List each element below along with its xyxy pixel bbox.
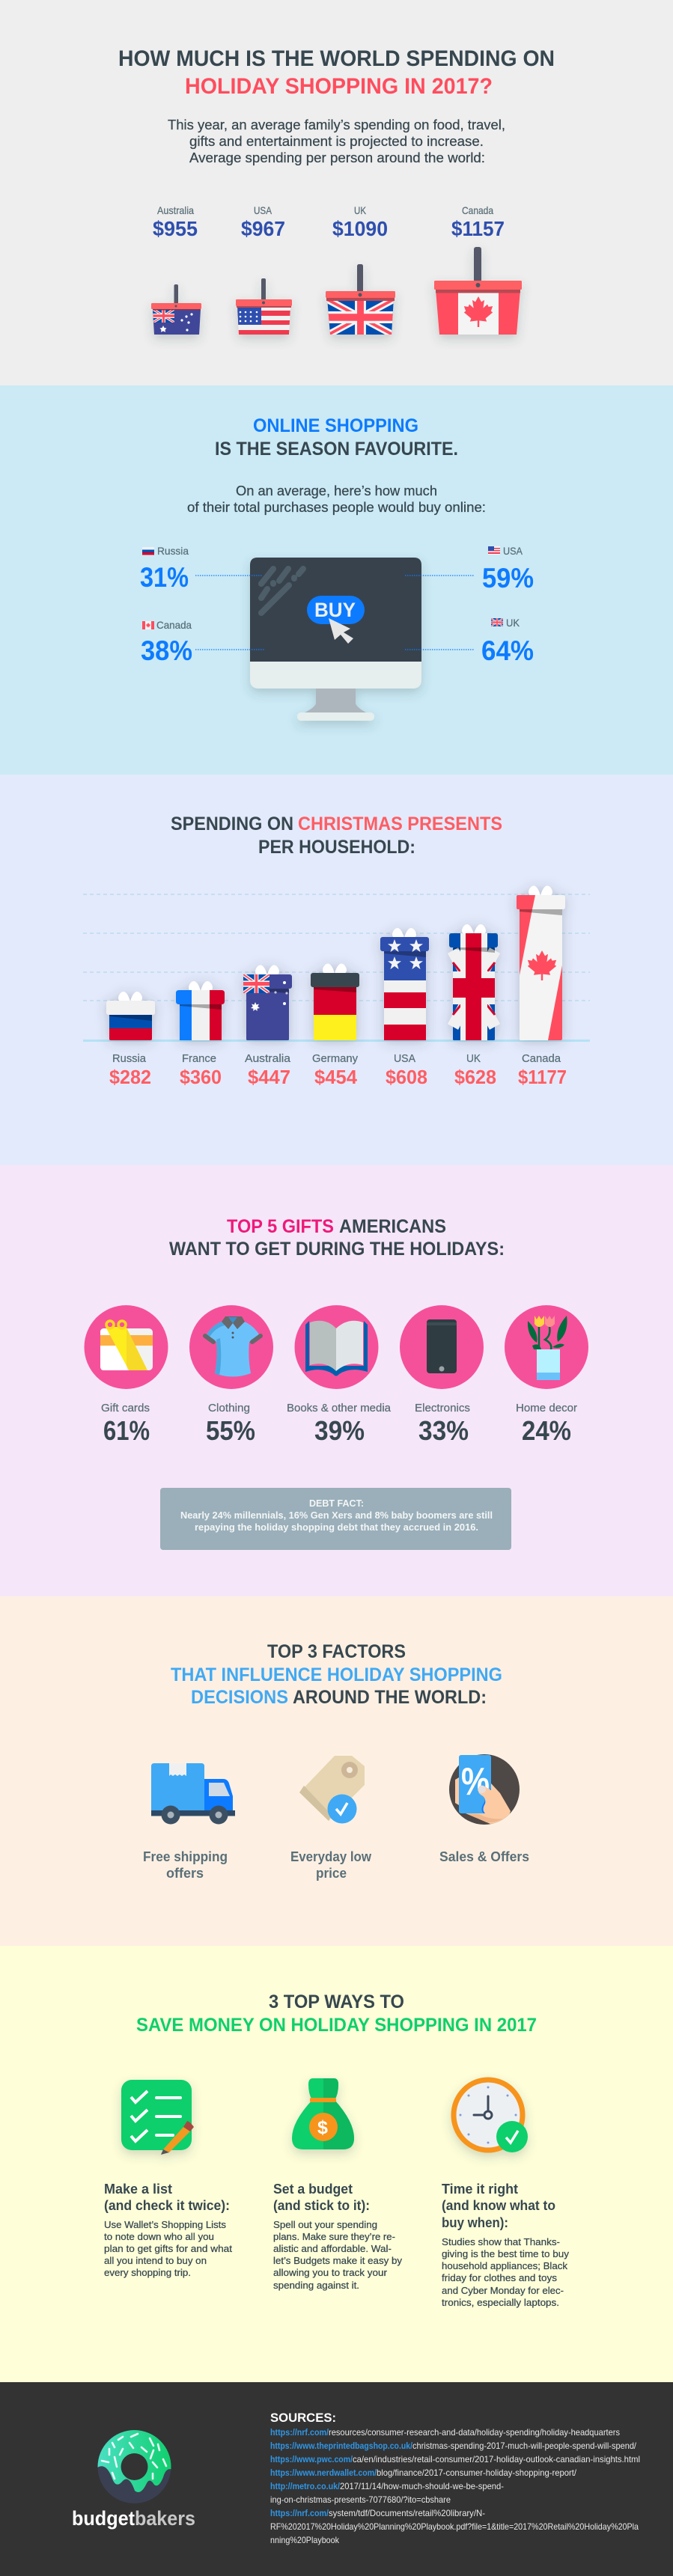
tip: time it right: buy when):: [442, 2215, 508, 2230]
panel: world holiday spending: [0, 0, 673, 385]
heading: TOP 3 FACTORS: [267, 1641, 406, 1662]
gift percentages: 55%: [206, 1415, 255, 1446]
sources list: [270, 2411, 640, 2545]
heading: PER HOUSEHOLD:: [258, 837, 415, 858]
gift: France: [176, 981, 225, 1040]
chart labels: UK: [466, 1052, 481, 1065]
stat: UK $1090: $1090: [332, 217, 388, 240]
sources list: system/tdf/Documents/retail%20library/N-: [329, 2508, 485, 2518]
icon: money bag: $: [317, 2117, 328, 2138]
chart labels: Germany: [312, 1052, 358, 1065]
factor labels: offers: [166, 1866, 204, 1881]
tip: make a list: every shopping trip.: [104, 2267, 191, 2278]
chart labels: USA: [394, 1052, 415, 1065]
panel: footer: [0, 2382, 673, 2576]
stat: Canada $1157: Canada: [462, 204, 493, 216]
gift: Russia: [106, 992, 155, 1040]
stat: UK 64%: 64%: [481, 635, 534, 666]
gift labels: Books & other media: [287, 1402, 392, 1414]
icon: Australia basket: [151, 284, 201, 335]
panel: christmas presents: [0, 775, 673, 1165]
icon: truck: [151, 1763, 235, 1825]
stat: Canada $1157: $1157: [451, 217, 505, 240]
heading: 3 TOP WAYS TO: [269, 1991, 404, 2012]
gift percentages: [103, 1415, 571, 1446]
chart labels: Canada: [522, 1052, 561, 1065]
sources list: blog/finance/2017-consumer-holiday-shopping-report/: [377, 2467, 577, 2478]
gift percentages: 33%: [418, 1415, 469, 1446]
sources list: http://metro.co.uk/: [270, 2481, 341, 2491]
gift: UK: [449, 924, 498, 1040]
sources list: 2017/11/14/how-much-should-we-be-spend-: [340, 2481, 504, 2491]
sources list: ca/en/industries/retail-consumer/2017-holiday-outlook-canadian-insights.html: [353, 2454, 640, 2464]
stat: Australia $955: [153, 204, 198, 240]
sources list: https://www.nerdwallet.com/: [270, 2467, 377, 2478]
stat: Russia 31%: 31%: [140, 562, 189, 593]
title: HOLIDAY SHOPPING IN 2017?: [185, 74, 493, 99]
tip: make a list: Use Wallet’s Shopping Lists: [104, 2219, 226, 2230]
sources list: nning%20Playbook: [270, 2535, 340, 2545]
icon: checklist and pencil: [121, 2080, 194, 2155]
tip: time it right: giving is the best time to buy: [442, 2248, 570, 2259]
icon: phone: [400, 1305, 484, 1389]
intro text: [168, 117, 505, 165]
tip: set a budget: Set a budget: [273, 2182, 353, 2197]
heading: [169, 1216, 505, 1260]
title: [118, 46, 555, 99]
heading: [171, 814, 502, 858]
callout: debt fact: Nearly 24% millennials, 16% Gen Xers and 8% baby boomers are still: [180, 1510, 493, 1521]
icon: book: [295, 1305, 379, 1389]
stat: USA 59%: [482, 545, 534, 593]
tip: make a list: plan to get gifts for and what: [104, 2243, 232, 2254]
sources list: https://www.pwc.com/: [270, 2454, 353, 2464]
logo: budgetbakers donut: [72, 2425, 195, 2530]
heading: TOP 5 GIFTS: [227, 1216, 334, 1237]
callout: debt fact: repaying the holiday shopping debt that they accrued in 2016.: [195, 1522, 478, 1533]
sources list: christmas-spending-2017-much-will-people-spend-will-spend/: [412, 2441, 637, 2451]
stat: USA $967: $967: [241, 217, 285, 240]
stat: USA 59%: 59%: [482, 563, 534, 593]
stat: Russia 31%: [140, 545, 189, 593]
icon: price tag: [299, 1756, 365, 1823]
heading: IS THE SEASON FAVOURITE.: [215, 439, 458, 460]
tip: time it right: household appliances; Black: [442, 2260, 568, 2271]
tip: time it right: Time it right: [442, 2182, 518, 2197]
chart values: $447: [248, 1066, 290, 1088]
gift labels: Home decor: [516, 1402, 577, 1414]
callout: debt fact: DEBT FACT:: [309, 1498, 364, 1509]
heading: THAT INFLUENCE HOLIDAY SHOPPING: [171, 1664, 502, 1685]
stat: UK $1090: [332, 204, 388, 240]
chart values: $360: [180, 1066, 222, 1088]
chart labels: Australia: [245, 1052, 291, 1065]
callout: debt fact: [160, 1488, 511, 1550]
heading: DECISIONS: [191, 1687, 288, 1708]
sources list: ing-on-christmas-presents-7077680/?ito=cbshare: [270, 2494, 451, 2505]
tip: time it right: Studies show that Thanks-: [442, 2236, 560, 2247]
factor labels: Everyday low: [290, 1849, 372, 1864]
stat: USA $967: USA: [254, 204, 272, 216]
tip: make a list: all you intend to buy on: [104, 2255, 207, 2266]
icon: phone with percent in hand: %: [461, 1760, 490, 1804]
icon: flowers in vase: [505, 1305, 588, 1389]
stat: Australia $955: $955: [153, 217, 198, 240]
icon: cursor: [329, 618, 353, 644]
heading: CHRISTMAS PRESENTS: [298, 814, 502, 834]
gift labels: [101, 1402, 577, 1414]
tip: time it right: friday for clothes and toys: [442, 2272, 558, 2283]
stat: UK 64%: UK: [506, 617, 520, 629]
heading: SAVE MONEY ON HOLIDAY SHOPPING IN 2017: [136, 2015, 537, 2036]
intro text: [187, 483, 486, 515]
tip: time it right: and Cyber Monday for elec-: [442, 2285, 564, 2296]
chart values: $1177: [518, 1066, 567, 1088]
gift: USA: [380, 928, 429, 1040]
sources list: https://www.theprintedbagshop.co.uk/: [270, 2441, 413, 2451]
stat: Australia $955: Australia: [157, 204, 194, 216]
heading: SPENDING ON: [171, 814, 293, 834]
intro text: of their total purchases people would buy online:: [187, 500, 486, 515]
icon: money bag: [292, 2078, 354, 2149]
heading: WANT TO GET DURING THE HOLIDAYS:: [169, 1239, 505, 1260]
stat: USA 59%: USA: [503, 545, 523, 557]
buy button: [307, 596, 365, 624]
chart values: $454: [314, 1066, 358, 1088]
factor labels: Sales & Offers: [439, 1849, 529, 1864]
tip: make a list: [104, 2182, 232, 2278]
icon: monitor: [250, 558, 421, 721]
icon: phone with percent in hand: [449, 1754, 520, 1825]
stat: Canada 38%: [141, 619, 192, 666]
gift percentages: 61%: [103, 1415, 150, 1446]
tip: set a budget: Spell out your spending: [273, 2219, 377, 2230]
gift labels: Electronics: [415, 1402, 470, 1414]
stat: Russia 31%: Russia: [157, 545, 189, 557]
dotted connector lines: [195, 576, 474, 650]
gift labels: Clothing: [208, 1402, 250, 1414]
panel: top 3 factors: [0, 1596, 673, 1946]
factor labels: Free shipping: [143, 1849, 228, 1864]
factor labels: [143, 1849, 529, 1881]
gift: Germany: [311, 964, 359, 1040]
chart values: $608: [386, 1066, 427, 1088]
heading: [215, 415, 458, 460]
tip: set a budget: plans. Make sure they’re re-: [273, 2231, 395, 2242]
screen glare: [261, 569, 303, 613]
logo: budgetbakers donut: budget: [72, 2507, 135, 2530]
stat: Canada $1157: [451, 204, 505, 240]
intro text: Average spending per person around the world:: [189, 150, 485, 165]
panel: top 5 gifts: [0, 1165, 673, 1596]
chart labels: [112, 1052, 561, 1065]
stat: Canada 38%: Canada: [156, 619, 192, 631]
intro text: gifts and entertainment is projected to increase.: [189, 134, 484, 149]
tip: set a budget: alistic and affordable. Wal-: [273, 2243, 392, 2254]
logo: budgetbakers donut: bakers: [135, 2507, 195, 2530]
title: HOW MUCH IS THE WORLD SPENDING ON: [118, 46, 555, 71]
sources list: SOURCES:: [270, 2411, 336, 2425]
tip: time it right: [442, 2182, 570, 2308]
panel: online shopping: [0, 385, 673, 775]
icon: UK basket: [326, 264, 395, 335]
heading: AROUND THE WORLD:: [293, 1687, 487, 1708]
sources list: resources/consumer-research-and-data/holiday-spending/holiday-headquarters: [329, 2427, 620, 2438]
heading: AMERICANS: [339, 1216, 446, 1237]
tip: set a budget: spending against it.: [273, 2280, 359, 2291]
factor labels: price: [316, 1866, 347, 1881]
tip: time it right: tronics, especially laptops.: [442, 2297, 559, 2308]
tip: set a budget: let’s Budgets make it easy by: [273, 2255, 403, 2266]
panel: ways to save money: [0, 1946, 673, 2382]
icon: shirt: [189, 1305, 273, 1389]
gift percentages: 24%: [522, 1415, 571, 1446]
tip: make a list: Make a list: [104, 2182, 172, 2197]
heading: ONLINE SHOPPING: [253, 415, 418, 436]
gift labels: Gift cards: [101, 1402, 150, 1414]
icon: USA basket: [236, 278, 292, 335]
chart labels: France: [182, 1052, 216, 1065]
tip: set a budget: allowing you to track your: [273, 2267, 388, 2278]
gift percentages: 39%: [314, 1415, 365, 1446]
stat: Canada 38%: 38%: [141, 635, 192, 666]
stat: UK $1090: UK: [354, 204, 367, 216]
tip: time it right: (and know what to: [442, 2198, 555, 2213]
heading: [136, 1991, 537, 2036]
heading: [171, 1641, 502, 1708]
chart values: [109, 1066, 567, 1088]
icon: Canada basket: [434, 247, 522, 335]
sources list: https://nrf.com/: [270, 2508, 329, 2518]
sources list: https://nrf.com/: [270, 2427, 329, 2438]
sources list: RF%202017%20Holiday%20Planning%20Playbook.pdf?file=1&title=2017%20Retail%20Holiday%20Pla: [270, 2521, 639, 2532]
chart labels: Russia: [112, 1052, 147, 1065]
intro text: On an average, here’s how much: [236, 483, 437, 498]
stat: USA $967: [241, 204, 285, 240]
tip: make a list: to note down who all you: [104, 2231, 214, 2242]
tip: make a list: (and check it twice):: [104, 2198, 230, 2213]
stat: UK 64%: [481, 617, 534, 666]
tip: set a budget: (and stick to it):: [273, 2198, 370, 2213]
chart values: $628: [454, 1066, 496, 1088]
gift: Canada: [517, 886, 565, 1040]
intro text: This year, an average family’s spending on food, travel,: [168, 117, 505, 132]
icon: clock: [454, 2080, 528, 2152]
chart values: $282: [109, 1066, 151, 1088]
gift: Australia: [243, 965, 292, 1040]
buy button: BUY: [314, 599, 356, 621]
tip: set a budget: [273, 2182, 403, 2291]
icon: gift card: [84, 1305, 168, 1389]
